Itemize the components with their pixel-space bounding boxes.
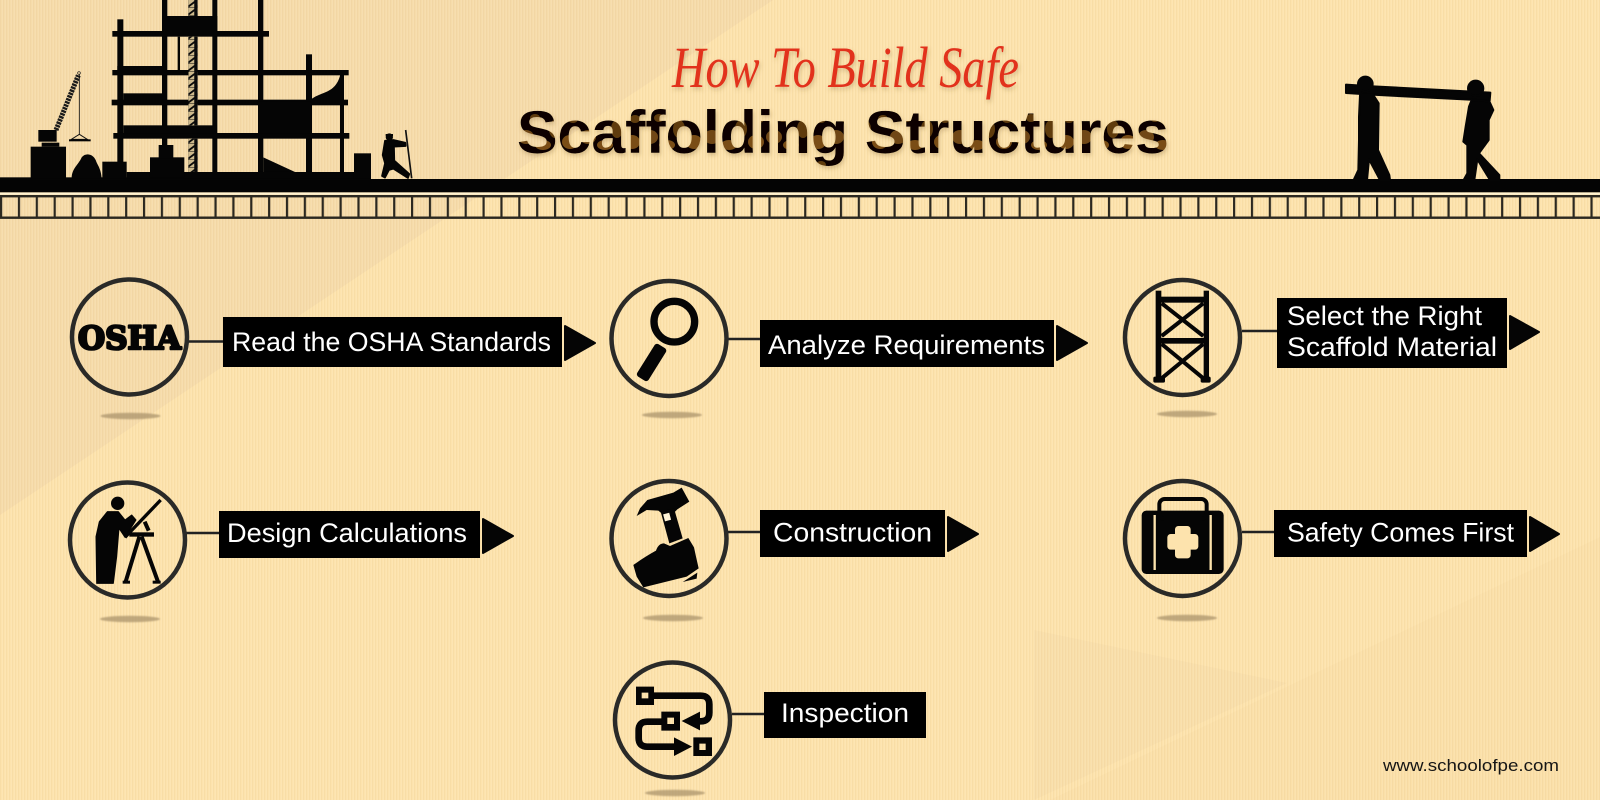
connector (728, 531, 762, 533)
icon circle (70, 482, 185, 598)
shadow (1157, 615, 1217, 621)
arrow (948, 517, 978, 551)
label line 2: Scaffold Material (1287, 332, 1497, 362)
title reflection (517, 162, 1169, 164)
icon: hand holding hammer (633, 488, 699, 587)
label box (760, 320, 1054, 367)
icon: person at drafting table (96, 497, 161, 584)
shadow (643, 615, 703, 621)
icon: scaffold frame (1153, 291, 1211, 383)
connector (732, 713, 766, 715)
two workers carrying plank (1346, 77, 1499, 180)
label box (219, 511, 480, 558)
connector (1242, 531, 1276, 533)
label line 1: Select the Right (1287, 301, 1483, 331)
connector (186, 532, 220, 534)
step 6: Safety Comes First (1125, 481, 1559, 621)
website url: www.schoolofpe.com (1382, 756, 1559, 775)
ground and rail (0, 179, 1600, 219)
arrow (483, 519, 513, 553)
worker with pole (382, 130, 412, 178)
icon circle (1125, 481, 1240, 596)
icon: OSHA wordmark: OSHA (78, 319, 182, 357)
label: Read the OSHA Standards (232, 327, 551, 357)
label box (1274, 510, 1527, 557)
arrow (1510, 316, 1539, 349)
label box (223, 317, 562, 367)
shadow (642, 412, 702, 418)
step 3: Select the Right Scaffold Material (1125, 280, 1539, 417)
label: Design Calculations (227, 518, 467, 548)
icon: first aid kit (1142, 499, 1224, 574)
arrow (1530, 517, 1559, 551)
icon: process flow (636, 687, 712, 756)
arrow (565, 326, 595, 360)
label: Construction (773, 518, 932, 548)
step 4: Design Calculations (70, 482, 513, 622)
shadow (100, 616, 160, 622)
title: How To Build Safe: How To Build Safe (671, 35, 1019, 100)
building construction silhouette (0, 0, 371, 181)
icon circle (612, 281, 726, 396)
shadow (100, 413, 160, 419)
connector (1242, 330, 1278, 332)
icon circle (615, 662, 730, 778)
step 2: Analyze Requirements (612, 281, 1087, 418)
label box (764, 692, 926, 738)
icon circle (1125, 280, 1240, 395)
label: Safety Comes First (1287, 518, 1514, 548)
connector (728, 338, 762, 340)
arrow (1057, 326, 1087, 360)
icon circle (612, 481, 726, 596)
icon: magnifying glass (636, 301, 695, 382)
shadow (645, 790, 705, 796)
label box (1277, 298, 1507, 368)
icon circle (72, 280, 187, 394)
connector (188, 340, 224, 343)
step 5: Construction (612, 481, 978, 621)
shadow (1157, 411, 1217, 417)
label: Inspection (781, 698, 909, 728)
step 7: Inspection (615, 662, 926, 796)
step 1: Read the OSHA Standards (72, 280, 595, 419)
label: Analyze Requirements (768, 330, 1045, 360)
title: Scaffolding Structures: Scaffolding Structures (517, 99, 1169, 166)
label box (760, 510, 945, 557)
